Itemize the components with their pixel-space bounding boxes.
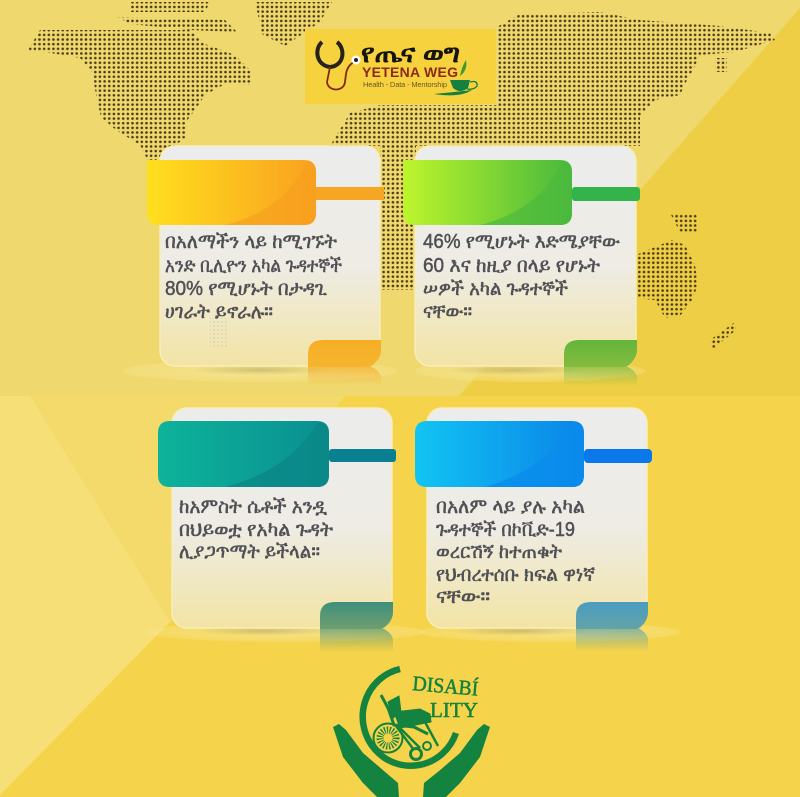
card 2 text: ሠዎች አካል ጉዳተኞች [423, 278, 568, 300]
panel: card 1 [147, 146, 384, 386]
panel: card 4 [415, 408, 652, 652]
icon: left hand [333, 724, 399, 797]
icon: stethoscope [317, 42, 360, 90]
disability text: DISABÍ [412, 671, 479, 701]
card 3 text: ከአምስት ሴቶች አንዷ [179, 496, 327, 518]
card 1 text: በአለማችን ላይ ከሚገኙት [165, 231, 337, 253]
logo Amharic name: የጤና ወግ [361, 40, 460, 68]
card 4 text: ወረርሽኝ ከተጠቁት [436, 541, 562, 563]
card 2 corner tab [564, 340, 637, 367]
card 3 text: ሊያጋጥማት ይችላል። [179, 541, 320, 563]
world map dots [28, 2, 775, 348]
card 3 text: በህይወቷ የአካል ጉዳት [179, 519, 333, 541]
card 1 text [165, 231, 342, 323]
card 1 text: አንድ ቢሊዮን አካል ጉዳተኞች [165, 255, 342, 277]
floor shadows [122, 360, 680, 642]
panel: card 3 [158, 408, 396, 652]
card 4 text: የህብረተሰቡ ክፍል ዋነኛ [436, 564, 595, 586]
card 3 header [158, 421, 396, 487]
card 1 corner tab [308, 340, 381, 367]
card 2 text: 46% የሚሆኑት እድሜያቸው [423, 231, 620, 253]
panel: card 2 [403, 146, 640, 386]
card 1 dotted accent [210, 318, 228, 348]
disability text [412, 671, 479, 722]
card 4 text: በአለም ላይ ያሉ አካል [436, 496, 585, 518]
logo tagline: Health - Data - Mentorship [363, 80, 447, 89]
card 2 header [403, 160, 640, 225]
icon: circular arc [363, 669, 456, 766]
card 1 text: ሀገራት ይኖራሉ። [165, 301, 273, 323]
card 4 text [436, 496, 595, 608]
disability logo [333, 669, 490, 797]
icon: wheelchair [374, 695, 438, 760]
logo: Yetena Weg [305, 29, 496, 104]
card 1 header [147, 160, 384, 225]
card 2 text: ናቸው። [423, 301, 472, 323]
card 4 corner tab [576, 602, 648, 629]
card 4 text: ናቸው። [436, 586, 490, 608]
disability text: LITY [430, 698, 478, 722]
card 3 corner tab [320, 602, 393, 629]
card 2 text [423, 231, 620, 323]
logo English name: YETENA WEG [362, 64, 458, 80]
icon: tea cup [434, 60, 477, 95]
card 1 text: 80% የሚሆኑት በታዳጊ [165, 278, 327, 300]
card 3 text [179, 496, 333, 563]
card 4 header [415, 421, 652, 487]
icon: right hand [423, 724, 490, 797]
card 2 text: 60 እና ከዚያ በላይ የሆኑት [423, 255, 600, 277]
card 4 text: ጉዳተኞች በኮቪድ-19 [436, 519, 575, 541]
